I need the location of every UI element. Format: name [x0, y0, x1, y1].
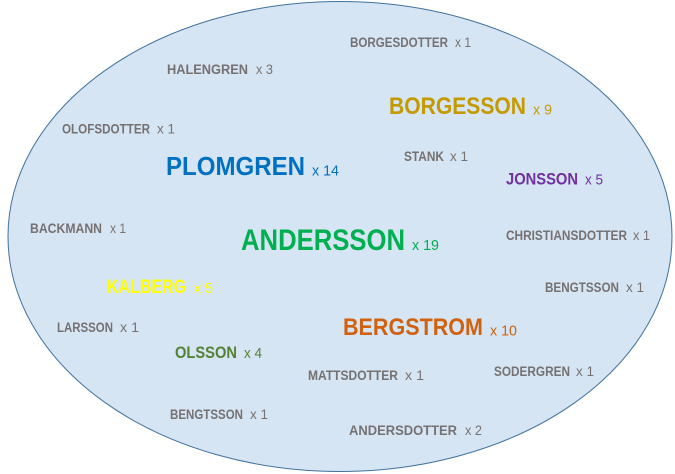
label: STANK x 1 [404, 148, 468, 164]
label: LARSSON x 1: x 1 [120, 319, 139, 335]
label: ANDERSSON x 19: x 19 [412, 237, 439, 254]
label: PLOMGREN x 14: PLOMGREN [166, 153, 305, 181]
label: HALENGREN x 3: HALENGREN [167, 62, 248, 77]
label: OLSSON x 4: OLSSON [175, 343, 237, 362]
label: STANK x 1: STANK [404, 149, 444, 164]
label: OLOFSDOTTER x 1: x 1 [157, 120, 175, 136]
label: BORGESSON x 9: BORGESSON [389, 93, 526, 120]
label: OLSSON x 4: x 4 [244, 345, 262, 362]
label: KALBERG x 5: x 5 [194, 280, 213, 297]
label: SODERGREN x 1: x 1 [576, 363, 594, 379]
label: ANDERSDOTTER x 2: x 2 [465, 422, 482, 438]
label: BERGSTROM x 10: BERGSTROM [343, 314, 483, 341]
label: BENGTSSON x 1 (right): x 1 [626, 279, 644, 295]
label: KALBERG x 5: KALBERG [107, 277, 186, 298]
label: ANDERSSON x 19: ANDERSSON [241, 224, 405, 257]
label: SODERGREN x 1: SODERGREN [494, 364, 570, 379]
label: BORGESSON x 9: x 9 [533, 102, 552, 118]
label: MATTSDOTTER x 1: MATTSDOTTER [308, 368, 398, 383]
label: BENGTSSON x 1 (right): BENGTSSON [545, 280, 619, 295]
label: BACKMANN x 1: BACKMANN [30, 221, 102, 236]
label: BERGSTROM x 10: x 10 [490, 322, 517, 340]
label: CHRISTIANSDOTTER x 1: x 1 [633, 227, 650, 243]
label: BORGESDOTTER x 1: x 1 [455, 34, 471, 50]
label: LARSSON x 1: LARSSON [57, 320, 113, 335]
label: HALENGREN x 3: x 3 [256, 61, 273, 77]
label: OLOFSDOTTER x 1: OLOFSDOTTER [62, 122, 150, 136]
label: JONSSON x 5: x 5 [585, 172, 603, 188]
label: PLOMGREN x 14: x 14 [312, 162, 339, 180]
label: ANDERSDOTTER x 2: ANDERSDOTTER [349, 423, 457, 438]
label: BENGTSSON x 1 (left): x 1 [250, 406, 268, 422]
label: CHRISTIANSDOTTER x 1: CHRISTIANSDOTTER [506, 228, 627, 243]
label: BENGTSSON x 1 (left): BENGTSSON [170, 407, 243, 422]
label: BORGESDOTTER x 1: BORGESDOTTER [350, 35, 448, 50]
label: JONSSON x 5: JONSSON [506, 170, 578, 188]
label: MATTSDOTTER x 1: x 1 [405, 367, 424, 383]
label: STANK x 1: x 1 [450, 148, 468, 164]
label: BACKMANN x 1: x 1 [110, 220, 126, 236]
